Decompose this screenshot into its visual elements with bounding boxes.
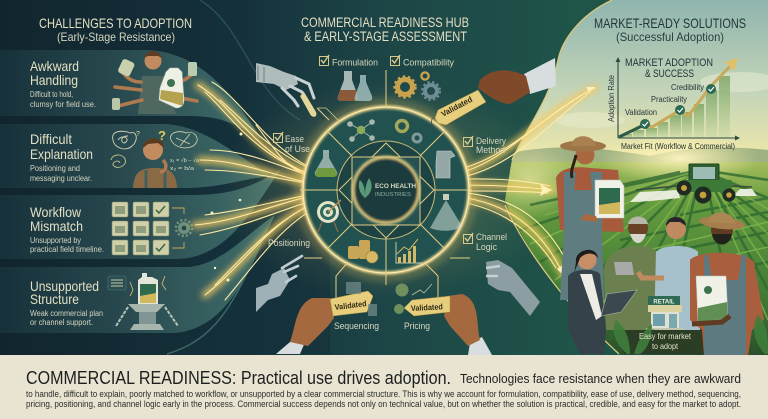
check label: compatibility: Compatibility (403, 56, 454, 68)
text: practical field timeline: practical field timeline. (30, 245, 104, 254)
icon: question mark: ? (158, 128, 166, 143)
robot arm: bottom-right (486, 260, 540, 316)
figure: man in blue shirt (638, 217, 700, 330)
panel: difficult explanation (0, 124, 272, 188)
check label: formulation (320, 55, 378, 68)
text: messaging unclear: messaging unclear. (30, 174, 92, 183)
glow streams into and out of hub (195, 80, 595, 300)
heading: awkward handling line 2: Handling (30, 72, 78, 88)
heading: difficult explanation line 2: Explanation (30, 146, 93, 162)
icon: tractor with sprayer (630, 164, 757, 204)
check label: delivery method (464, 135, 506, 155)
text: difficult to hold: Difficult to hold, (30, 90, 73, 99)
tag text: validated: Validated (440, 95, 474, 119)
chart axes (618, 59, 738, 138)
text: weak commercial plan: Weak commercial plan (30, 309, 103, 318)
icon: wheel gears (396, 120, 421, 142)
icon: confused farmer and tangled thoughts (111, 131, 197, 188)
panel: unsupported structure (0, 215, 275, 333)
check label: delivery method: Method (476, 144, 505, 155)
check label: delivery method: Delivery (476, 135, 506, 146)
icon: rising chart (396, 239, 423, 263)
chart title line 2: & SUCCESS (645, 68, 694, 80)
icon: farmer juggling products (112, 51, 197, 114)
title: early-stage assessment: & EARLY-STAGE ASSESSMENT (304, 29, 467, 44)
check label: formulation: Formulation (332, 56, 378, 68)
label: positioning: Positioning (268, 237, 310, 248)
label: practicality: Practicality (651, 95, 687, 104)
heading: workflow mismatch line 2: Mismatch (30, 218, 83, 234)
check label: channel logic: Channel (476, 231, 507, 242)
robot hand: top-left with test tube (256, 63, 340, 122)
icon: spray cone (430, 194, 462, 231)
chart check marks (640, 84, 716, 129)
text: formula one: x₁ = √b − √a (170, 157, 200, 164)
figure: older man (604, 216, 668, 330)
hand: top-right with validated tag (431, 58, 556, 126)
text: clumsy for field use: clumsy for field use. (30, 100, 96, 109)
text: positioning and: Positioning and (30, 164, 80, 173)
icon: sequencing document and coins (346, 282, 377, 316)
logo: eco health: ECO HEALTH (375, 183, 416, 190)
check label: compatibility (390, 55, 454, 68)
icon: flask with green liquid (315, 150, 337, 177)
check label: channel logic: Logic (476, 241, 497, 252)
icon: flasks (338, 71, 372, 101)
icon: pricing coins (394, 284, 432, 314)
label: sequencing: Sequencing (334, 320, 379, 331)
icon: compatibility gears (394, 72, 440, 100)
icon: spray bottle (436, 151, 455, 178)
figure: businesswoman with tablet (568, 250, 637, 354)
wheel spokes (300, 70, 472, 310)
panel: commercial readiness summary (0, 355, 768, 419)
panel: workflow mismatch (0, 170, 280, 259)
heading: unsupported structure line 2: Structure (30, 291, 79, 307)
icon: jug on chained pedestal (108, 273, 178, 330)
text: or channel support: or channel support. (30, 318, 93, 327)
text: unsupported by: Unsupported by (30, 236, 81, 245)
title: commercial readiness hub: COMMERCIAL READINESS HUB (301, 15, 469, 30)
heading: difficult explanation: Difficult (30, 131, 72, 147)
chart bars (622, 76, 730, 138)
icon: retail store (646, 296, 684, 330)
subtitle: early-stage resistance: (Early-Stage Resistance) (57, 30, 175, 44)
chart title: MARKET ADOPTION (625, 57, 713, 69)
label: easy for market: Easy for market (639, 331, 692, 341)
tag text: validated: Validated (334, 299, 367, 312)
label: credibility: Credibility (671, 83, 704, 92)
axis label: market fit: Market Fit (Workflow & Commercial) (621, 142, 735, 151)
heading: unsupported structure: Unsupported (30, 278, 99, 294)
hand: bottom-left with validated tag (276, 291, 373, 354)
check label: channel logic (464, 231, 507, 252)
hand: bottom-right with validated tag (404, 294, 492, 355)
figure: farmer with product bag (690, 212, 764, 356)
label: pricing: Pricing (404, 320, 430, 331)
foreground foliage (622, 328, 704, 354)
title: challenges to adoption: CHALLENGES TO ADOPTION (39, 15, 192, 31)
check label: ease of use: of Use (285, 143, 310, 154)
robot hand: bottom-left (256, 256, 302, 312)
icon: leaf logo (359, 178, 372, 198)
icon: coins (348, 240, 378, 263)
label: to adopt: to adopt (652, 341, 679, 351)
figure: woman farmer with jug (556, 136, 624, 300)
lead text: technologies face resistance: Technologies face resistance when they are awkward (460, 371, 741, 386)
icon: retail store: RETAIL (653, 300, 675, 306)
logo: industries: INDUSTRIES (375, 192, 411, 198)
axis label: adoption rate: Adoption Rate (607, 74, 616, 122)
center emblem (339, 143, 434, 238)
label: validation: Validation (625, 108, 657, 117)
text: formula two: x₂ = b/a (170, 166, 195, 172)
check label: ease of use: Ease (285, 133, 304, 144)
icon: calendars and gear (112, 202, 192, 255)
icon: small question mark: ? (136, 131, 140, 138)
check label: ease of use (274, 132, 310, 154)
heading: workflow mismatch: Workflow (30, 204, 82, 220)
icon: molecule (347, 119, 375, 142)
heading: practical use drives adoption: COMMERCIAL READINESS: Practical use drives adoption. (26, 367, 451, 388)
subtitle: successful adoption: (Successful Adoption) (616, 30, 724, 44)
icon: plants (614, 315, 768, 354)
decorative outer swoosh curves (167, 0, 619, 354)
panel: market-ready background scene (480, 0, 768, 356)
icon: target with arrow (317, 200, 341, 232)
heading: awkward handling: Awkward (30, 58, 79, 74)
chart growth arrow (619, 58, 738, 137)
hub: commercial readiness wheel (294, 70, 478, 310)
tag text: validated: Validated (411, 302, 443, 313)
panel: awkward handling (0, 50, 262, 140)
chart: market adoption and success (607, 57, 740, 151)
